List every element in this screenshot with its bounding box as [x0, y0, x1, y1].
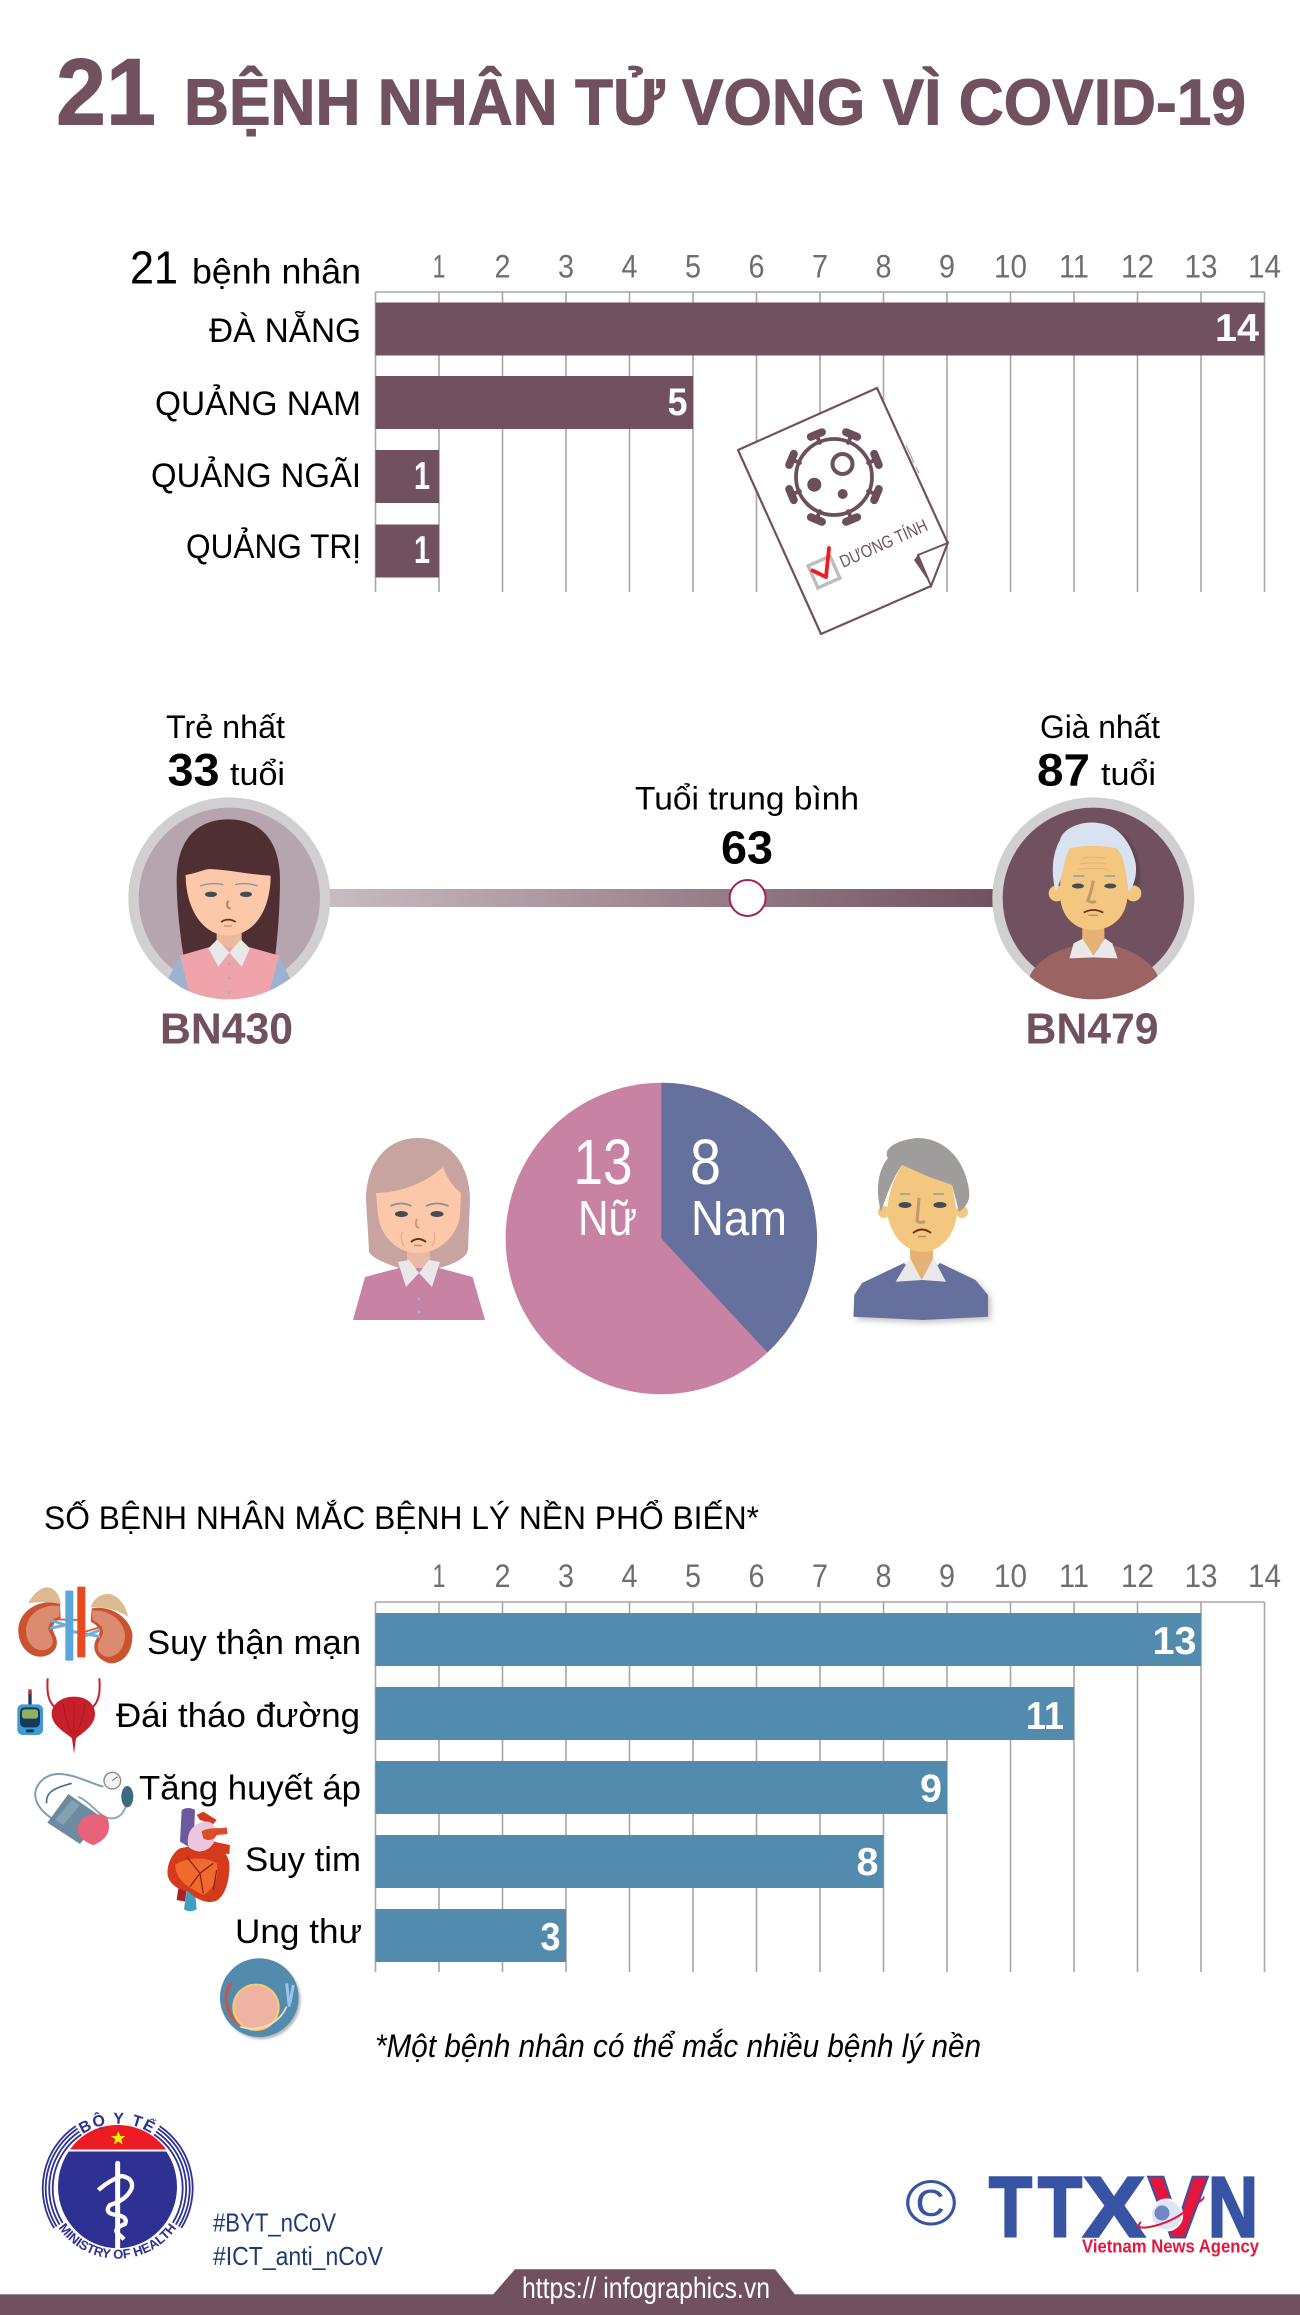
oldest age text: 87 — [1037, 744, 1090, 796]
axis numbers: 9 — [939, 248, 955, 284]
checkbox with red check — [808, 548, 840, 588]
axis numbers: 2 — [494, 1558, 510, 1594]
row: chronic kidney failure 13 — [147, 1613, 1201, 1666]
logo: Ministry of Health: MINISTRY OF HEALTH — [58, 2222, 176, 2259]
hashtags: #ICT_anti_nCoV — [213, 2241, 384, 2271]
icon: glucose meter and bladder — [17, 1678, 100, 1754]
row: chronic kidney failure 13: 13 — [1152, 1620, 1196, 1663]
average age text — [635, 780, 859, 874]
axis numbers: 2 — [494, 248, 510, 284]
copyright symbol: © — [905, 2167, 957, 2239]
youngest age text: tuổi — [230, 756, 285, 792]
hashtags — [213, 2208, 384, 2271]
axis numbers: 13 — [1184, 248, 1218, 284]
axis numbers: 13 — [1184, 1558, 1218, 1594]
row: Quảng Trị 1: QUẢNG TRỊ — [186, 528, 361, 566]
heading: common underlying conditions: SỐ BỆNH NHÂN MẮC BỆNH LÝ NỀN PHỔ BIẾN* — [44, 1500, 759, 1536]
row: Quảng Nam 5 — [155, 376, 693, 429]
axis numbers: 3 — [558, 1558, 574, 1594]
axis numbers: 12 — [1121, 248, 1154, 284]
youngest age text: Trẻ nhất — [166, 709, 285, 745]
axis numbers: 11 — [1059, 248, 1089, 284]
pie chart: gender — [506, 1083, 817, 1394]
axis numbers — [432, 1558, 1281, 1594]
title: 21 — [56, 40, 156, 146]
axis numbers: 12 — [1121, 1558, 1154, 1594]
row: Quảng Trị 1: 1 — [414, 529, 430, 572]
row: heart failure 8: Suy tim — [245, 1841, 361, 1879]
axis numbers: 3 — [558, 248, 574, 284]
row: Quảng Ngãi 1: 1 — [414, 455, 430, 498]
row: hypertension 9 — [139, 1761, 947, 1814]
row: Quảng Nam 5: QUẢNG NAM — [155, 385, 361, 423]
row: cancer 3: 3 — [540, 1916, 560, 1959]
title — [56, 40, 1246, 146]
row: hypertension 9: Tăng huyết áp — [139, 1770, 361, 1808]
axis numbers: 4 — [622, 248, 638, 284]
axis numbers: 6 — [748, 248, 764, 284]
row: heart failure 8: 8 — [856, 1841, 878, 1884]
row: Quảng Nam 5: 5 — [668, 381, 688, 424]
row: diabetes 11: Đái tháo đường — [116, 1697, 360, 1735]
oldest age text: tuổi — [1101, 756, 1156, 792]
logo: Ministry of Health — [42, 2112, 194, 2259]
axis numbers: 7 — [812, 248, 828, 284]
axis numbers: 14 — [1248, 248, 1281, 284]
icon: blood pressure monitor and heart — [35, 1772, 133, 1845]
icon: cancer cell — [220, 1958, 301, 2039]
axis numbers: 9 — [939, 1558, 955, 1594]
chart heading: 21 patients: 21 — [130, 242, 178, 294]
male count: 8 — [690, 1126, 721, 1198]
axis numbers: 1 — [432, 1558, 446, 1594]
axis numbers: 14 — [1248, 1558, 1281, 1594]
axis numbers — [432, 248, 1281, 284]
oldest age text: Già nhất — [1040, 709, 1160, 745]
footer bar with website — [0, 2269, 1300, 2315]
axis numbers: 1 — [432, 248, 446, 284]
row: diabetes 11: 11 — [1026, 1695, 1064, 1738]
bar chart: deaths by province — [130, 242, 1281, 592]
row: Quảng Ngãi 1 — [151, 450, 439, 503]
logo: TTXVN: V — [1149, 2160, 1207, 2256]
axis numbers: 5 — [685, 1558, 701, 1594]
male count: Nam — [691, 1192, 787, 1246]
youngest age text: 33 — [168, 744, 220, 796]
icon: virus — [789, 432, 879, 522]
title: BỆNH NHÂN TỬ VONG VÌ COVID-19 — [184, 66, 1246, 138]
average age text: Tuổi trung bình — [635, 780, 859, 816]
row: Quảng Trị 1 — [186, 524, 439, 578]
logo: TTXVN: Vietnam News Agency — [1082, 2237, 1259, 2257]
hashtags: #BYT_nCoV — [213, 2208, 337, 2238]
icon: kidneys — [18, 1587, 132, 1663]
axis numbers: 10 — [994, 248, 1027, 284]
axis numbers: 6 — [748, 1558, 764, 1594]
axis numbers: 5 — [685, 248, 701, 284]
female count: 13 — [574, 1126, 632, 1198]
row: Đà Nẵng 14 — [209, 302, 1264, 356]
logo: TTXVN: T — [1038, 2160, 1082, 2256]
female count: Nữ — [578, 1192, 637, 1246]
row: cancer 3 — [235, 1909, 566, 1962]
row: Đà Nẵng 14: 14 — [1215, 307, 1259, 350]
icon: elderly woman — [353, 1138, 485, 1320]
male count — [690, 1126, 787, 1246]
logo: TTXVN — [989, 2160, 1259, 2257]
oldest age text — [1037, 709, 1160, 796]
row: Quảng Ngãi 1: QUẢNG NGÃI — [151, 457, 361, 495]
axis numbers: 11 — [1059, 1558, 1089, 1594]
portrait: youngest patient — [128, 797, 330, 1003]
axis numbers: 4 — [622, 1558, 638, 1594]
average age text: 63 — [721, 822, 773, 874]
axis numbers: 10 — [994, 1558, 1027, 1594]
logo: TTXVN: X — [1083, 2160, 1145, 2256]
axis numbers: 8 — [876, 248, 892, 284]
female count — [574, 1126, 637, 1246]
row: heart failure 8 — [245, 1835, 884, 1888]
portrait: oldest patient — [992, 797, 1194, 1007]
row: hypertension 9: 9 — [920, 1768, 942, 1810]
chart heading: 21 patients: bệnh nhân — [192, 253, 361, 292]
age range slider — [325, 880, 998, 916]
logo: Ministry of Health: BỘ Y TẾ — [78, 2112, 157, 2134]
youngest age text — [166, 709, 285, 796]
icon: positive test document: DƯƠNG TÍNH — [836, 515, 931, 572]
row: diabetes 11 — [116, 1687, 1074, 1740]
icon: elderly man — [854, 1138, 991, 1323]
footnote: *Một bệnh nhân có thể mắc nhiều bệnh lý nền — [375, 2028, 981, 2064]
bar chart: underlying conditions — [116, 1558, 1281, 1972]
row: cancer 3: Ung thư — [235, 1913, 362, 1951]
axis numbers: 7 — [812, 1558, 828, 1594]
logo: TTXVN: N — [1208, 2160, 1258, 2256]
row: chronic kidney failure 13: Suy thận mạn — [147, 1624, 361, 1662]
logo: TTXVN: T — [989, 2160, 1032, 2256]
footer bar with website: https:// infographics.vn — [522, 2272, 770, 2305]
icon: positive test document — [738, 388, 948, 634]
icon: heart — [168, 1808, 230, 1911]
label: BN479: BN479 — [1026, 1004, 1158, 1054]
chart heading: 21 patients — [130, 242, 361, 294]
axis numbers: 8 — [876, 1558, 892, 1594]
label: BN430: BN430 — [160, 1004, 293, 1054]
row: Đà Nẵng 14: ĐÀ NẴNG — [209, 312, 361, 350]
